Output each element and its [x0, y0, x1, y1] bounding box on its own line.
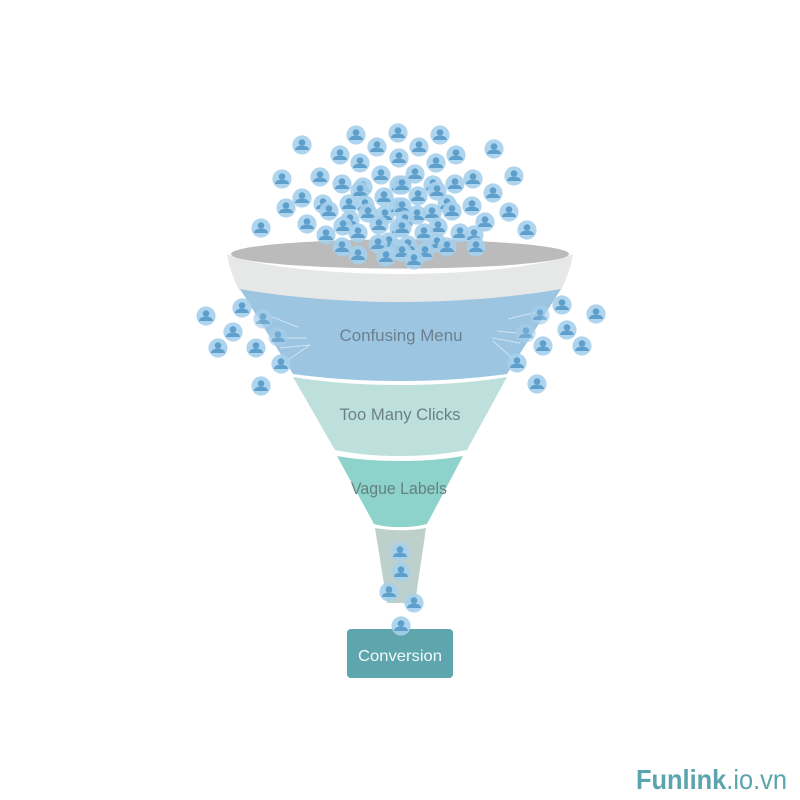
conversion box: Conversion [358, 648, 442, 665]
funnel segment: Too Many Clicks [293, 377, 507, 456]
icons: users in neck [379, 542, 424, 636]
funnel [227, 238, 573, 603]
streak lines [272, 312, 537, 360]
conversion box [347, 629, 453, 678]
funnel segment: Vague Labels [337, 456, 463, 527]
funnel segment: Confusing Menu: Confusing Menu [340, 326, 462, 345]
funnel segment: Confusing Menu [240, 289, 561, 381]
icons: users leaving right [507, 295, 606, 394]
logo: Funlink.io.vn [636, 764, 787, 795]
icons: users leaving left [196, 298, 291, 396]
funnel neck [375, 528, 426, 603]
funnel rim [227, 238, 573, 302]
funnel segment: Vague Labels: Vague Labels [351, 479, 447, 498]
icons: crowd above funnel [251, 123, 537, 270]
funnel segment: Too Many Clicks: Too Many Clicks [340, 405, 460, 424]
